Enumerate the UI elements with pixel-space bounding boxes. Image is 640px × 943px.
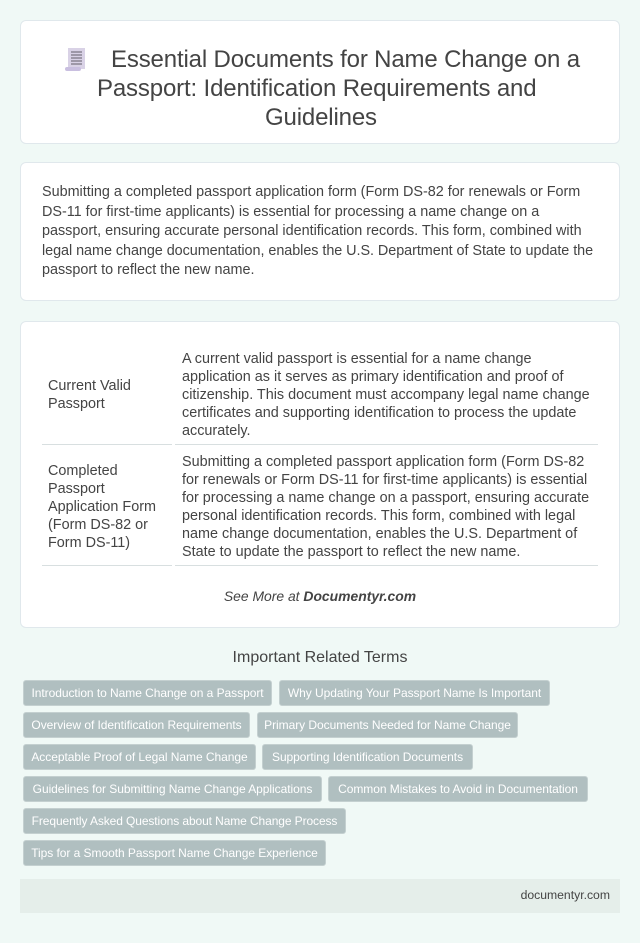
related terms tags: Guidelines for Submitting Name Change Applications (33, 782, 312, 796)
related terms tags: Frequently Asked Questions about Name Change Process (32, 814, 337, 828)
row 1 text: A current valid passport is essential for a name change (182, 351, 532, 367)
related terms tags: Primary Documents Needed for Name Change (264, 718, 511, 732)
row 2 text: personal identification records. This form, combined with legal (182, 508, 575, 524)
intro text: DS-11 for first-time applicants) is essential for processing a name change on a (42, 204, 539, 220)
row 1 label: Current Valid Passport (48, 378, 131, 412)
row 2 text: name change documentation, enables the U.S. Department of (182, 526, 577, 542)
related terms tags: Tips for a Smooth Passport Name Change Experience (31, 846, 318, 860)
icon: document (65, 48, 85, 71)
row 1 text: certificates and supporting identification to process the update (182, 405, 576, 421)
row 2 text: Submitting a completed passport application form (Form DS-82 (182, 454, 584, 470)
heading: Guidelines (265, 104, 377, 131)
related terms tags: Overview of Identification Requirements (31, 718, 242, 732)
related terms tags: Why Updating Your Passport Name Is Important (288, 686, 541, 700)
heading: Essential Documents for Name Change on a (111, 46, 580, 73)
row 1 text: citizenship. This document must accompany legal name change (182, 387, 590, 403)
footer text: documentyr.com (521, 888, 610, 902)
row 2 label: Completed Passport Application Form (Form DS-82 or Form DS-11) (48, 463, 156, 551)
row 2 text: for renewals or Form DS-11 for first-time applicants) is essential (182, 472, 587, 488)
intro text: legal name change documentation, enables the U.S. Department of State to update the (42, 242, 593, 258)
intro text: Submitting a completed passport application form (Form DS-82 for renewals or Form (42, 184, 580, 200)
row 2 text (182, 454, 589, 560)
heading: Passport: Identification Requirements and (97, 75, 536, 102)
row 1 text (182, 351, 590, 439)
row 2 text: for processing a name change on a passport, ensuring accurate (182, 490, 589, 506)
row 1 text: accurately. (182, 423, 251, 439)
title panel (20, 20, 620, 144)
row 2 text: State to update the passport to reflect the new name. (182, 544, 520, 560)
related terms tags: Supporting Identification Documents (272, 750, 463, 764)
footer (20, 879, 620, 913)
row 1 text: application as it serves as primary identification and proof of (182, 369, 564, 385)
intro text: passport to reflect the new name. (42, 262, 254, 278)
table panel (20, 321, 620, 628)
intro text: passport, ensuring accurate personal identification records. This form, combined with (42, 223, 582, 239)
heading (97, 46, 580, 131)
related terms tags: Introduction to Name Change on a Passport (31, 686, 264, 700)
related terms tags: Common Mistakes to Avoid in Documentation (338, 782, 578, 796)
see more link: See More at Documentyr.com (224, 588, 416, 604)
intro text (42, 184, 593, 278)
related terms heading: Important Related Terms (233, 649, 407, 666)
related terms tags (23, 680, 588, 866)
intro text panel (20, 162, 620, 301)
related terms tags: Acceptable Proof of Legal Name Change (31, 750, 248, 764)
